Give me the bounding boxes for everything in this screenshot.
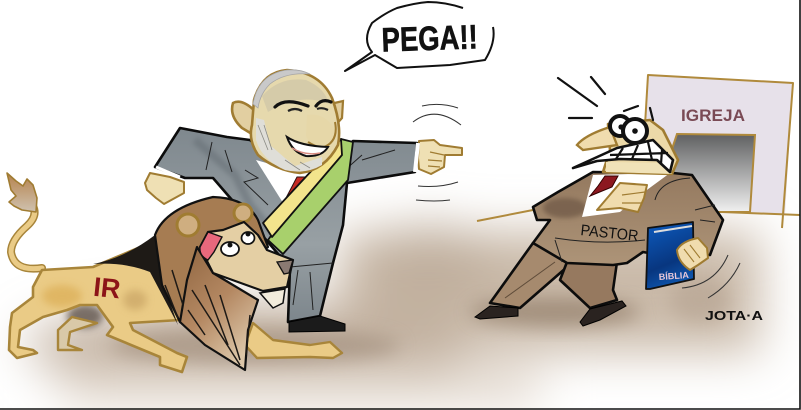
pastor label: PASTOR [580,222,639,245]
mane top [155,197,268,322]
lion nose [277,260,293,274]
front leg [560,262,617,308]
back leg [490,240,570,308]
shoe [289,316,345,332]
hand on book [677,238,708,270]
speech bubble [345,2,494,71]
mane lower [180,247,258,370]
signature: JOTA·A [705,308,764,323]
mouth [573,140,673,172]
church label: IGREJA [681,106,745,125]
shirt [582,173,670,217]
book label: BÍBLIA [658,270,690,282]
shoes [475,306,518,319]
sash [268,139,353,254]
shirt [256,160,312,206]
lion jaw [260,289,285,308]
president figure [145,70,462,332]
church building [477,75,800,228]
hand on chest [597,183,647,212]
head [603,120,678,174]
nose [577,127,617,150]
church door [665,134,755,212]
motion lines [413,104,461,201]
head [251,70,339,173]
beard [256,118,322,172]
tie [590,176,618,196]
far hind leg [58,317,97,350]
suit [155,128,417,322]
snout [200,222,293,291]
tail tuft [7,173,37,212]
lion mark: IR [92,272,122,304]
ear right [330,101,343,128]
lion [7,173,342,372]
dark back mane [93,235,178,325]
jacket [533,172,723,265]
pastor figure [475,77,740,326]
far front leg [245,323,342,358]
lion body [9,243,187,372]
tie [286,177,309,204]
eyes [288,108,328,111]
motion lines [682,255,740,298]
speech text: PEGA!! [381,18,478,60]
left fist [145,173,184,204]
tail [11,206,42,269]
hair [253,70,310,108]
eyes [610,116,630,136]
pointing hand [418,140,462,174]
mouth [287,137,328,156]
ear left [232,102,257,137]
ears [177,214,199,236]
nose [306,115,335,148]
lion eyes [221,242,239,256]
book [646,222,694,289]
tongue [200,232,222,260]
brows [275,101,331,107]
cuff [156,167,180,177]
shock lines [558,77,653,120]
